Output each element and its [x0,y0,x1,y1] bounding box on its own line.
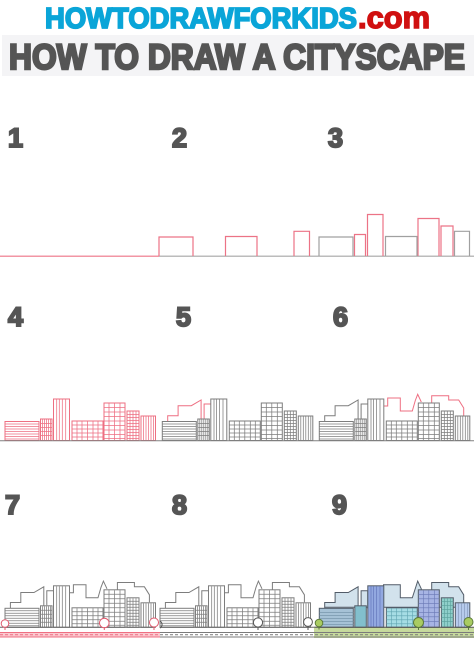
step numbers row 1: 3 [328,123,343,153]
site header: .com [358,0,430,35]
step 9: coloured city [314,581,474,627]
step numbers row 3: 8 [172,490,187,520]
step numbers row 1 [8,123,343,153]
red trees [1,618,159,630]
step numbers row 3: 9 [332,490,347,520]
step 6: gray buildings with red skyline [319,394,470,440]
step 8: city outlines [160,581,316,627]
outlined trees [160,618,312,630]
row 2 ground line [0,440,474,442]
step 9: green ground [314,628,474,638]
step 5: gray buildings with red roofs [162,399,313,440]
step numbers row 1: 2 [172,123,187,153]
gray road [160,632,474,637]
steps 1 to 3: ground line and block outlines [0,214,474,256]
step 7: city outlines [0,581,156,627]
step numbers row 2: 5 [176,302,191,332]
step numbers row 2 [8,302,348,332]
step 4: buildings in red [5,399,156,440]
step numbers row 2: 6 [333,302,348,332]
step numbers row 2: 4 [8,302,23,332]
step numbers row 3: 7 [5,490,20,520]
step numbers row 3 [5,490,347,520]
step numbers row 1: 1 [8,123,23,153]
green trees [315,618,473,630]
red road [0,632,160,637]
site header: HOWTODRAWFORKIDS [45,3,357,35]
